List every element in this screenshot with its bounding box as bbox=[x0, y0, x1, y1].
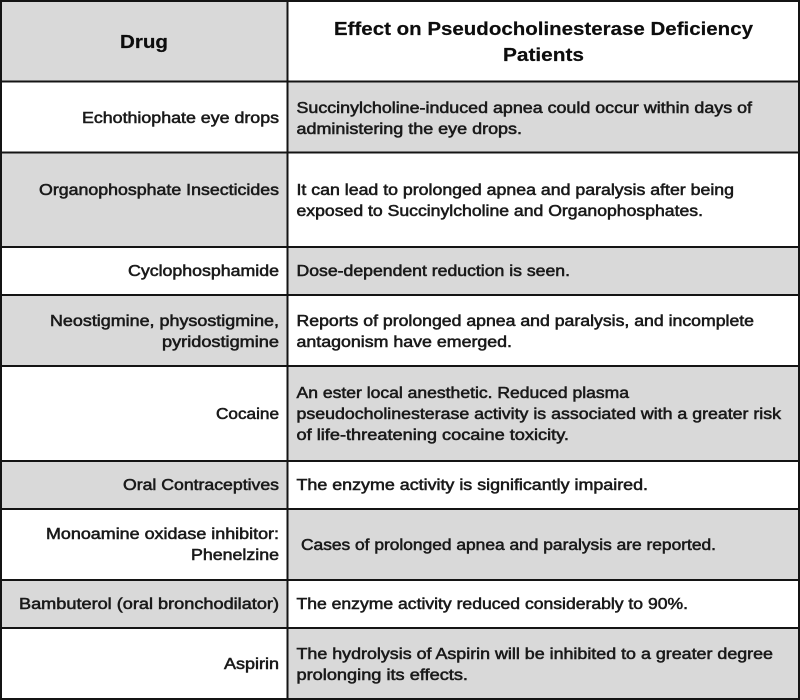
row: Aspirin: Aspirin bbox=[224, 656, 279, 673]
row: Organophosphate Insecticides: Organophosphate Insecticides bbox=[39, 182, 279, 199]
row: Organophosphate Insecticides bbox=[1, 152, 734, 247]
row: Echothiophate eye drops: Echothiophate eye drops bbox=[82, 110, 279, 127]
header: Drug: Drug bbox=[120, 31, 168, 52]
row: Organophosphate Insecticides: It can lead to prolonged apnea and paralysis after being bbox=[296, 182, 734, 199]
header: Effect on Pseudocholinesterase Deficiency Patients bbox=[334, 18, 754, 65]
row: Cocaine: pseudocholinesterase activity is associated with a greater risk bbox=[296, 406, 781, 423]
row: Aspirin: The hydrolysis of Aspirin will be inhibited to a greater degree bbox=[296, 646, 773, 663]
row: Monoamine oxidase inhibitor: Phenelzine: Phenelzine bbox=[191, 547, 279, 564]
row: Bambuterol (oral bronchodilator): Bambuterol (oral bronchodilator) bbox=[19, 596, 279, 613]
row: Monoamine oxidase inhibitor: Phenelzine: Cases of prolonged apnea and paralysis are reported. bbox=[301, 537, 716, 554]
row: Neostigmine, physostigmine, pyridostigmine: antagonism have emerged. bbox=[296, 334, 512, 351]
row: Monoamine oxidase inhibitor: Phenelzine bbox=[46, 509, 799, 580]
row: Oral Contraceptives: Oral Contraceptives bbox=[123, 477, 279, 494]
header row bbox=[1, 1, 754, 82]
row: Organophosphate Insecticides: exposed to Succinylcholine and Organophosphates. bbox=[296, 203, 703, 220]
row: Bambuterol (oral bronchodilator): The enzyme activity reduced considerably to 90%. bbox=[296, 596, 688, 613]
row: Neostigmine, physostigmine, pyridostigmine: Reports of prolonged apnea and paralysis, and incomplete bbox=[296, 313, 754, 330]
row: Monoamine oxidase inhibitor: Phenelzine: Monoamine oxidase inhibitor: bbox=[46, 526, 279, 543]
row: Cyclophosphamide: Cyclophosphamide bbox=[128, 263, 279, 280]
row: Echothiophate eye drops bbox=[82, 82, 799, 152]
row: Cocaine: An ester local anesthetic. Reduced plasma bbox=[296, 385, 629, 402]
row: Echothiophate eye drops: Succinylcholine-induced apnea could occur within days of bbox=[296, 100, 753, 117]
row: Neostigmine, physostigmine, pyridostigmine bbox=[1, 295, 754, 366]
row: Cocaine bbox=[216, 366, 799, 461]
row: Neostigmine, physostigmine, pyridostigmine: pyridostigmine bbox=[162, 334, 279, 351]
row: Oral Contraceptives: The enzyme activity is significantly impaired. bbox=[296, 477, 648, 494]
row: Cocaine: Cocaine bbox=[216, 406, 279, 423]
row: Echothiophate eye drops: administering the eye drops. bbox=[296, 121, 522, 138]
row: Aspirin bbox=[224, 628, 799, 699]
header: Effect on Pseudocholinesterase Deficiency Patients: Effect on Pseudocholinesterase Deficiency bbox=[334, 18, 754, 39]
row: Aspirin: prolonging its effects. bbox=[296, 667, 468, 684]
row: Neostigmine, physostigmine, pyridostigmine: Neostigmine, physostigmine, bbox=[50, 313, 279, 330]
row: Oral Contraceptives bbox=[1, 461, 648, 509]
row: Cyclophosphamide bbox=[128, 247, 799, 295]
row: Cyclophosphamide: Dose-dependent reduction is seen. bbox=[296, 263, 570, 280]
row: Bambuterol (oral bronchodilator) bbox=[1, 580, 688, 628]
row: Cocaine: of life-threatening cocaine toxicity. bbox=[296, 427, 569, 444]
header: Effect on Pseudocholinesterase Deficiency Patients: Patients bbox=[503, 44, 584, 65]
